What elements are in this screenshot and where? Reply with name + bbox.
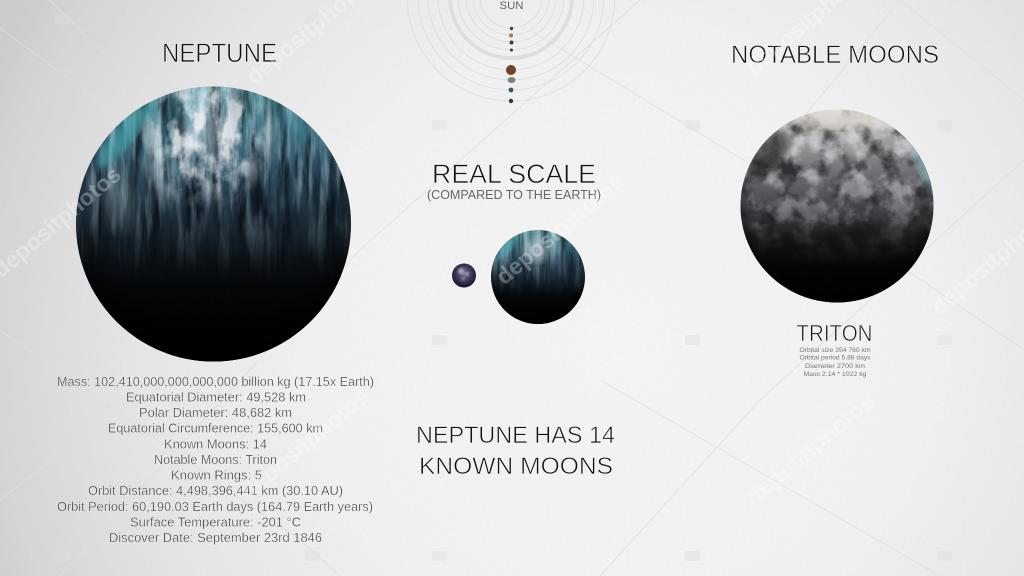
text block: Neptune facts: Polar Diameter: 48,682 km (139, 405, 292, 420)
text block: Neptune facts: Mass: 102,410,000,000,000,000 billion kg (17.15x Earth) (57, 374, 374, 389)
planet: Triton moon (735, 108, 947, 303)
text block: Triton facts: Mass 2.14 * 1022 kg (804, 372, 866, 378)
icon: solar system planets (506, 27, 516, 103)
diagram: solar system orbits (407, 0, 615, 103)
watermark: stock photo marks: depositphotos (741, 388, 879, 510)
watermark: stock photo marks: depositphotos (236, 383, 374, 505)
heading: Real scale: REAL SCALE (432, 159, 596, 189)
label: Triton: TRITON (796, 320, 872, 346)
text block: Neptune facts: Equatorial Diameter: 49,528 km (126, 390, 306, 404)
text block: Neptune facts (57, 374, 374, 545)
heading: Notable moons: NOTABLE MOONS (731, 41, 939, 69)
planet: Neptune large (76, 86, 351, 362)
text block: Neptune facts: Discover Date: September 23rd 1846 (109, 530, 322, 545)
watermark: stock photo marks: depositphotos (491, 168, 629, 290)
heading: Neptune has 14 known moons: KNOWN MOONS (419, 453, 613, 480)
text block: Neptune facts: Known Rings: 5 (171, 468, 262, 482)
text block: Neptune facts: Orbit Distance: 4,498,396,441 km (30.10 AU) (88, 483, 343, 498)
text block: Triton facts: Orbital size 354 760 km (800, 348, 870, 354)
label: Sun: SUN (500, 0, 524, 12)
heading: Neptune: NEPTUNE (162, 38, 277, 68)
text block: Neptune facts: Surface Temperature: -201 °C (130, 514, 301, 530)
text block: Triton facts: Orbital period 5.88 days (800, 356, 870, 362)
heading: Neptune has 14 known moons (416, 422, 615, 480)
heading: Neptune has 14 known moons: NEPTUNE HAS 14 (416, 422, 615, 449)
text block: Neptune facts: Orbit Period: 60,190.03 Earth days (164.79 Earth years) (57, 499, 373, 514)
text block: Triton facts (800, 348, 870, 378)
planet: Neptune scale (490, 230, 586, 324)
text block: Triton facts: Diameter 2700 km (805, 364, 865, 370)
subheading: compared to the Earth: (COMPARED TO THE EARTH) (427, 187, 601, 202)
planet: Earth scale (452, 264, 476, 288)
text block: Neptune facts: Notable Moons: Triton (154, 452, 277, 467)
text block: Neptune facts: Known Moons: 14 (164, 436, 267, 452)
text block: Neptune facts: Equatorial Circumference: 155,600 km (108, 420, 323, 436)
